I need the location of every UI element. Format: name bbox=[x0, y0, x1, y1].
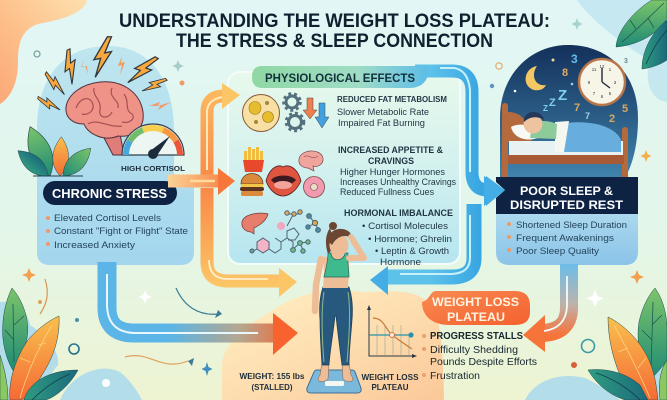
sleep bullets: Poor Sleep Quality bbox=[516, 246, 599, 257]
text: hormonal imbalance: • Leptin & Growth bbox=[375, 246, 449, 257]
text: appetite: CRAVINGS bbox=[368, 156, 414, 166]
icon: clock: 12 bbox=[600, 64, 605, 69]
peach panel bottom centre bbox=[222, 290, 444, 400]
icon: fat cell bbox=[242, 94, 280, 132]
arrow: stress to effects horizontal orange bbox=[168, 168, 235, 195]
panel: chronic stress bbox=[13, 37, 194, 265]
icon: zzz: Z bbox=[543, 104, 548, 113]
text: appetite: INCREASED APPETITE & bbox=[338, 145, 443, 155]
icon: bed and sleeper bbox=[502, 103, 628, 179]
sleep title bbox=[510, 184, 623, 212]
label: chart caption: WEIGHT LOSS bbox=[362, 373, 419, 382]
plateau title: WEIGHT LOSS bbox=[432, 295, 519, 309]
sleep bullets: Shortened Sleep Duration bbox=[516, 220, 627, 231]
icon: clock: 11 bbox=[592, 67, 597, 72]
plateau title: PLATEAU bbox=[447, 310, 505, 324]
plateau bullets: Difficulty Shedding bbox=[430, 345, 518, 356]
icon: clock: 3 bbox=[614, 80, 617, 85]
plateau bullets: Frustration bbox=[430, 371, 480, 382]
label: weight stalled: WEIGHT: 155 lbs bbox=[240, 372, 305, 381]
figure: stressed woman on scale bbox=[307, 222, 364, 393]
stress bullets bbox=[46, 213, 188, 251]
icon: open mouth bbox=[266, 166, 301, 196]
stress bullets: Elevated Cortisol Levels bbox=[54, 213, 161, 224]
panel: poor sleep bbox=[486, 45, 638, 265]
label: chart caption bbox=[362, 373, 419, 392]
text: hormonal imbalance: Hormone bbox=[380, 257, 421, 268]
woman feet bbox=[318, 363, 353, 382]
leggings stripes bbox=[322, 292, 350, 362]
icon: brain bbox=[66, 82, 143, 155]
stars and numbers: 2 bbox=[609, 113, 615, 125]
woman left arm bbox=[315, 259, 321, 311]
text: appetite: Increases Unhealthy Cravings bbox=[340, 177, 456, 187]
icon: clock bbox=[579, 59, 625, 105]
arrow: sleep to plateau bbox=[523, 264, 569, 352]
stars and numbers: 7 bbox=[585, 111, 590, 121]
label: weight stalled bbox=[240, 372, 305, 392]
sleep title: DISRUPTED REST bbox=[510, 198, 623, 212]
arrow: sleep to woman blue bbox=[370, 204, 474, 295]
effects heading: PHYSIOLOGICAL EFFECTS bbox=[265, 73, 415, 85]
sleep bullets bbox=[507, 220, 627, 257]
text: fat metabolism: REDUCED FAT METABOLISM bbox=[337, 94, 447, 104]
icon: plant bbox=[13, 123, 96, 182]
title bbox=[119, 11, 550, 52]
stars and numbers: 3 bbox=[571, 52, 578, 66]
arrow: stress to woman lower orange bbox=[207, 188, 297, 297]
text: appetite bbox=[338, 145, 456, 197]
woman midriff and neck bbox=[323, 248, 349, 288]
icon: lightning bolts bbox=[36, 37, 171, 111]
text: hormonal imbalance bbox=[344, 208, 453, 268]
text: appetite: Higher Hunger Hormones bbox=[340, 167, 445, 177]
gauge label: HIGH CORTISOL bbox=[121, 164, 185, 173]
plateau bullets: Pounds Despite Efforts bbox=[430, 357, 537, 368]
icon: clock: 5 bbox=[609, 91, 612, 96]
stars and numbers: 7 bbox=[574, 102, 580, 114]
stress title: CHRONIC STRESS bbox=[52, 186, 167, 201]
teal line bbox=[369, 334, 410, 336]
panel: physiological effects bbox=[228, 66, 505, 268]
leaves bottom right bbox=[588, 288, 667, 400]
icon: zzz bbox=[543, 87, 567, 113]
stars and numbers bbox=[514, 52, 628, 125]
icon: liver bbox=[242, 213, 268, 234]
stars and numbers: 8 bbox=[562, 67, 568, 79]
icon: zzz: Z bbox=[549, 97, 556, 109]
stress title pill bbox=[43, 181, 177, 205]
woman top bbox=[324, 253, 349, 277]
icon: moon bbox=[526, 66, 546, 90]
icon: cortisol gauge bbox=[122, 124, 184, 159]
icon: zzz: Z bbox=[558, 87, 567, 104]
icon: donut bbox=[304, 176, 324, 198]
icon: clock: 9 bbox=[588, 80, 591, 85]
plateau title bbox=[432, 295, 519, 324]
leaves bottom left bbox=[0, 288, 78, 400]
icon: scale bbox=[307, 370, 361, 393]
title: UNDERSTANDING THE WEIGHT LOSS PLATEAU: bbox=[119, 11, 550, 32]
sleep title box bbox=[496, 177, 638, 214]
sleep panel lower bbox=[496, 214, 638, 265]
section: appetite and cravings bbox=[240, 145, 456, 198]
icon: fries bbox=[243, 147, 264, 172]
icon: clock: 1 bbox=[609, 67, 612, 72]
sleep bullets: Frequent Awakenings bbox=[516, 233, 614, 244]
woman head and hair bbox=[326, 222, 351, 256]
stress bullets: Constant "Fight or Flight" State bbox=[54, 226, 188, 237]
icon: gears bbox=[284, 94, 304, 131]
icon: craving brain bbox=[299, 151, 323, 171]
woman legs bbox=[320, 287, 352, 365]
icon: molecules bbox=[250, 210, 320, 253]
text: fat metabolism bbox=[337, 94, 447, 129]
chart axes bbox=[369, 307, 414, 356]
arrow head overlay into sleep box bbox=[486, 176, 505, 206]
icon: clock: 6 bbox=[601, 94, 604, 99]
section: reduced fat metabolism bbox=[242, 94, 447, 132]
woman raised arm bbox=[349, 237, 364, 258]
plateau chart bbox=[367, 305, 417, 358]
panel: weight loss plateau bbox=[422, 291, 537, 382]
stars and numbers: 5 bbox=[622, 103, 628, 115]
stress panel background bbox=[37, 46, 194, 265]
text: hormonal imbalance: HORMONAL IMBALANCE bbox=[344, 208, 453, 218]
stress bullets: Increased Anxiety bbox=[54, 240, 135, 251]
orange curve bbox=[373, 318, 412, 349]
night sky circle bbox=[500, 45, 638, 177]
plateau title pill bbox=[422, 291, 530, 325]
text: appetite: Reduced Fullness Cues bbox=[340, 187, 434, 197]
arrow: top blue from effects to sleep bbox=[415, 68, 505, 206]
effects panel background bbox=[228, 72, 460, 264]
arrow: stress to woman blue-orange bbox=[107, 262, 298, 355]
icon: down arrows bbox=[303, 98, 329, 128]
text: fat metabolism: Impaired Fat Burning bbox=[338, 118, 425, 129]
icon: burger bbox=[240, 174, 264, 196]
text: hormonal imbalance: • Hormone; Ghrelin bbox=[368, 234, 452, 245]
section: hormonal imbalance bbox=[242, 208, 453, 268]
text: fat metabolism: Slower Metabolic Rate bbox=[337, 107, 429, 118]
stars and numbers: 3 bbox=[624, 58, 628, 65]
effects heading band bbox=[252, 66, 429, 88]
peach blob top left bbox=[0, 0, 87, 104]
plateau bullets bbox=[422, 331, 537, 382]
text: hormonal imbalance: • Cortisol Molecules bbox=[362, 221, 448, 232]
label: weight stalled: (STALLED) bbox=[252, 383, 293, 392]
icon: clock: 7 bbox=[593, 91, 596, 96]
arrow: stress to effects upper orange bbox=[207, 83, 240, 182]
sleep title: POOR SLEEP & bbox=[520, 184, 613, 198]
label: chart caption: PLATEAU bbox=[372, 383, 409, 392]
plateau bullets: PROGRESS STALLS bbox=[430, 331, 523, 342]
title: THE STRESS & SLEEP CONNECTION bbox=[176, 31, 493, 52]
decorative small arrows bbox=[40, 279, 218, 364]
leaves top right bbox=[616, 0, 667, 69]
